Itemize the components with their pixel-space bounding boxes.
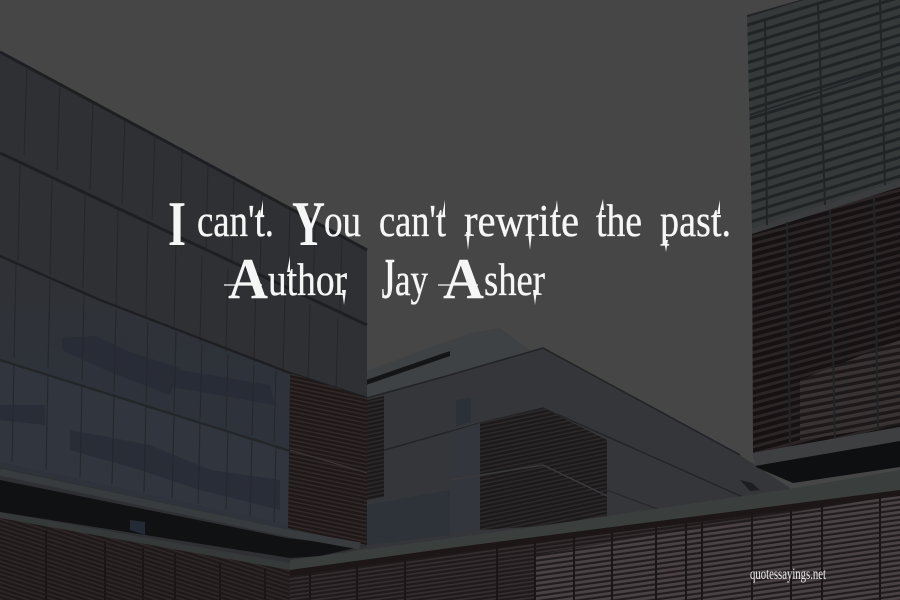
quote text: past. <box>660 196 731 246</box>
building: low foreground louvre wing <box>0 470 900 600</box>
quote text: can't <box>379 196 446 246</box>
author line <box>224 246 545 311</box>
author line: A <box>228 246 268 311</box>
author line: J <box>381 246 395 311</box>
louvred corner block <box>450 408 607 530</box>
building: rear roof <box>363 328 530 405</box>
author line: sher <box>484 255 545 305</box>
author line: ay <box>395 255 428 305</box>
quote text: can't. <box>197 196 274 246</box>
quote text: rewrite <box>464 196 579 246</box>
mullions <box>12 66 342 522</box>
lower band <box>0 512 367 570</box>
quote text: the <box>596 196 642 246</box>
louvred panel <box>288 373 367 545</box>
building: large left block <box>0 52 367 570</box>
author line: A <box>443 246 484 311</box>
glass reflections <box>0 336 280 510</box>
floor bands <box>0 52 367 250</box>
author line: uthor <box>268 255 347 305</box>
quote text: ou <box>324 196 361 246</box>
quote text: I <box>168 188 186 259</box>
dark soffit <box>0 480 360 558</box>
building: right tower <box>747 0 900 483</box>
watermark: quotessayings.net <box>750 566 826 583</box>
building: middle block <box>367 348 790 560</box>
quote text <box>168 188 731 259</box>
quote text: Y <box>292 188 325 259</box>
